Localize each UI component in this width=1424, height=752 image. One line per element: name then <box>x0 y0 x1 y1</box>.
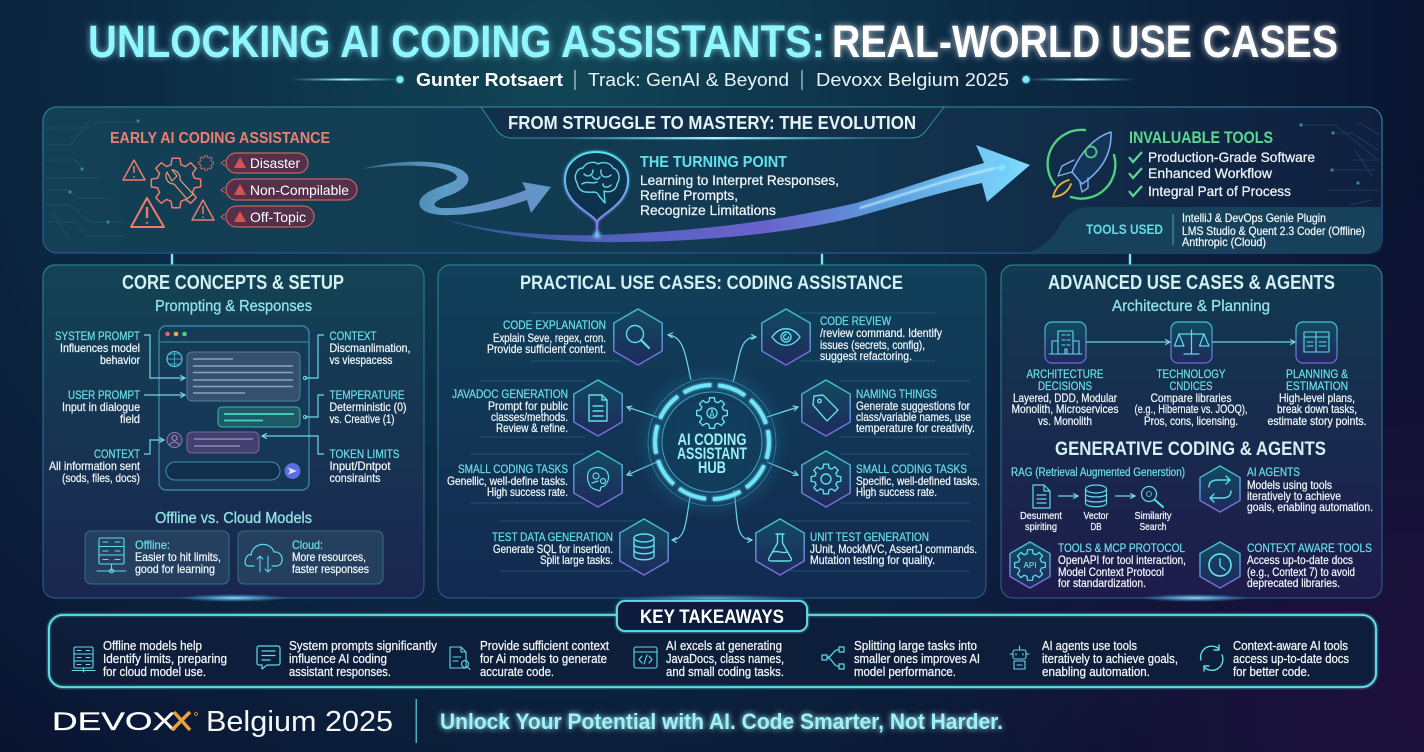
card: offline: Offline: <box>135 538 170 552</box>
card: cloud <box>238 531 383 584</box>
rag pipeline: Desument <box>1020 510 1062 522</box>
heading tab: key takeaways <box>617 601 807 631</box>
use case: code explanation: Provide sufficient content. <box>487 342 606 356</box>
icon: planning board <box>1296 322 1337 363</box>
takeaway 3: accurate code. <box>480 665 554 679</box>
tools used panel: Anthropic (Cloud) <box>1182 235 1266 249</box>
technology choices text <box>1134 367 1248 428</box>
takeaway 3: Provide sufficient context <box>480 639 609 653</box>
panel: key takeaways <box>49 601 1376 687</box>
left labels: SYSTEM PROMPT <box>55 329 141 343</box>
takeaway 7: access up-to-date docs <box>1233 652 1349 666</box>
rag pipeline: spiriting <box>1025 521 1057 533</box>
invaluable tools list: INVALUABLE TOOLS <box>1129 129 1273 147</box>
left labels: behavior <box>100 353 140 367</box>
left labels: All information sent <box>49 459 141 473</box>
left labels: USER PROMPT <box>68 388 141 402</box>
icon: broken gear and warnings <box>123 156 214 227</box>
technology choices text: TECHNOLOGY <box>1156 367 1226 381</box>
right labels: vs viespacess <box>330 353 392 367</box>
use case: code review <box>762 309 942 365</box>
context aware tools: CONTEXT AWARE TOOLS <box>1247 541 1372 555</box>
header tab: FROM STRUGGLE TO MASTERY: THE EVOLUTION <box>508 113 916 133</box>
use case: test data generation: Generate SQL for insertion. <box>493 542 613 556</box>
takeaway 1 <box>72 639 227 679</box>
architecture decisions text: DECISIONS <box>1038 379 1092 393</box>
takeaway 2: System prompts significantly <box>289 639 438 653</box>
right labels: Discmanlimation, <box>330 341 410 355</box>
footer logo: devoxx belgium 2025: DEVOX <box>52 708 176 736</box>
subtitle: Devoxx Belgium 2025 <box>816 70 1009 90</box>
context aware tools: (e.g., Context 7) to avoid <box>1247 565 1355 579</box>
takeaway 5: Splitting large tasks into <box>854 639 977 653</box>
architecture decisions text: Monolith, Microservices <box>1012 402 1118 416</box>
tools used panel: TOOLS USED <box>1086 221 1163 237</box>
takeaway 4: and small coding tasks. <box>666 665 784 679</box>
takeaway 1: for cloud model use. <box>103 665 206 679</box>
planning and estimation text: PLANNING & <box>1286 367 1348 381</box>
use case: code review: /review command. Identify <box>820 326 942 340</box>
icon: rocket <box>1048 130 1115 199</box>
use case: unit test generation: UNIT TEST GENERATION <box>810 530 929 544</box>
use case: small coding tasks right: Specific, well-defined tasks. <box>856 474 980 488</box>
early AI heading: EARLY AI CODING ASSISTANCE <box>110 130 330 147</box>
use case: naming things: class/variable names, use <box>856 410 971 424</box>
takeaway 2 <box>257 639 438 679</box>
left labels: CONTEXT <box>94 447 141 461</box>
icon: architecture <box>1045 322 1086 363</box>
takeaway 6 <box>1010 639 1178 679</box>
architecture decisions text <box>1012 367 1118 428</box>
panel: advanced use cases and agents <box>1001 265 1382 598</box>
takeaway 5 <box>822 639 980 679</box>
takeaway 2: assistant responses. <box>289 665 391 679</box>
use case: unit test generation <box>756 519 977 575</box>
use case: test data generation: Split large tasks. <box>540 553 613 567</box>
left labels <box>49 329 141 485</box>
title: REAL-WORLD USE CASES <box>832 16 1338 67</box>
connector ticks <box>171 254 1131 265</box>
AI agents <box>1200 465 1373 514</box>
takeaway 2: influence AI coding <box>289 652 387 666</box>
use case: javadoc generation: Prompt for public <box>488 399 568 413</box>
circuit decoration left <box>46 118 140 240</box>
use case: small coding tasks right: High success rate. <box>856 485 937 499</box>
tools and MCP protocol: for standardization. <box>1058 576 1146 590</box>
tools used panel <box>1025 207 1382 253</box>
card: offline: good for learning <box>135 562 215 576</box>
right labels: Deterministic (0) <box>330 400 406 414</box>
heading: core concepts: CORE CONCEPTS & SETUP <box>122 272 344 294</box>
subtitle <box>291 70 1136 90</box>
icon: scales <box>1171 322 1212 363</box>
use case: naming things <box>802 380 975 436</box>
tools and MCP protocol: OpenAPI for tool interaction, <box>1058 553 1186 567</box>
invaluable tools list: Production-Grade Software <box>1148 149 1315 165</box>
icon: brain balloon <box>565 152 628 241</box>
panel: practical use cases <box>438 265 986 598</box>
card: offline <box>85 531 229 584</box>
card: cloud: Cloud: <box>292 538 323 552</box>
use case: small coding tasks left: Genellic, well-define tasks. <box>447 474 568 488</box>
callout: non-compilable: Non-Compilable <box>250 182 349 198</box>
tools and MCP protocol: Model Context Protocol <box>1058 565 1164 579</box>
architecture decisions text: Layered, DDD, Modular <box>1013 391 1117 405</box>
context aware tools: deprecated libraries. <box>1247 576 1340 590</box>
technology choices text: (e.g., Hibernate vs. JOOQ), <box>1134 402 1248 416</box>
takeaway 1: Identify limits, preparing <box>103 652 227 666</box>
architecture decisions text: ARCHITECTURE <box>1026 367 1104 381</box>
AI agents: AI AGENTS <box>1247 465 1300 479</box>
use case: javadoc generation: JAVADOC GENERATION <box>452 387 568 401</box>
right labels: TEMPERATURE <box>330 388 404 402</box>
rag pipeline: DB <box>1090 521 1102 533</box>
circuit decoration right <box>1299 122 1380 205</box>
AI agents: goals, enabling automation. <box>1247 500 1373 514</box>
use case: code explanation: CODE EXPLANATION <box>503 318 606 332</box>
takeaway 5: model performance. <box>854 665 956 679</box>
takeaway 7: Context-aware AI tools <box>1233 639 1348 653</box>
footer tagline: Unlock Your Potential with AI. Code Smarter, Not Harder. <box>440 709 1003 734</box>
use case: code explanation: Explain Seve, regex, cron. <box>493 331 606 345</box>
turning point text: Refine Prompts, <box>640 187 738 203</box>
planning and estimation text: estimate story points. <box>1268 414 1366 428</box>
card: offline: Easier to hit limits, <box>135 550 221 564</box>
turning point text: Recognize Limitations <box>640 202 776 218</box>
tools and MCP protocol: API <box>1024 561 1036 570</box>
heading: practical use cases: PRACTICAL USE CASES: CODING ASSISTANCE <box>520 273 903 294</box>
header tab <box>481 107 944 139</box>
use case: test data generation <box>492 519 668 575</box>
takeaway 6: iteratively to achieve goals, <box>1042 652 1178 666</box>
tools used panel: IntelliJ & DevOps Genie Plugin <box>1182 211 1326 225</box>
footer logo: devoxx belgium 2025 <box>52 706 393 738</box>
context aware tools <box>1200 541 1372 590</box>
right labels: vs. Creative (1) <box>330 412 394 426</box>
tools and MCP protocol <box>1010 541 1186 590</box>
title <box>88 16 1338 67</box>
use case: small coding tasks right <box>802 451 980 507</box>
title: UNLOCKING AI CODING ASSISTANTS: <box>88 16 825 67</box>
subtitle: Gunter Rotsaert <box>416 70 563 90</box>
panel: core concepts and setup <box>43 265 424 598</box>
context aware tools: Access up-to-date docs <box>1247 553 1353 567</box>
use case: javadoc generation: Review & refine. <box>496 421 568 435</box>
callout: off-topic: Off-Topic <box>250 209 306 225</box>
use case: javadoc generation: classes/methods. <box>491 410 568 424</box>
heading: advanced: ADVANCED USE CASES & AGENTS <box>1048 272 1335 294</box>
rag pipeline: RAG (Retrieval Augmented Generstion) <box>1011 467 1185 479</box>
turning point text: THE TURNING POINT <box>640 154 787 171</box>
use case: code review: suggest refactoring. <box>820 349 912 363</box>
chat window mockup <box>159 326 309 490</box>
card: cloud: faster responses <box>292 562 369 576</box>
subheading: architecture and planning: Architecture & Planning <box>1112 298 1270 315</box>
takeaway 6: enabling automation. <box>1042 665 1150 679</box>
rag pipeline <box>1011 467 1185 533</box>
card: cloud: More resources, <box>292 550 366 564</box>
callout: disaster <box>221 153 308 173</box>
use case: code explanation <box>487 309 662 365</box>
footer logo: devoxx belgium 2025: Belgium 2025 <box>206 706 393 738</box>
use case: small coding tasks left: SMALL CODING TASKS <box>458 462 568 476</box>
turning point text <box>640 154 839 218</box>
tools used panel: LMS Studio & Quent 2.3 Coder (Offline) <box>1182 224 1365 238</box>
connector lines <box>144 335 324 454</box>
use case: small coding tasks left: High success rate. <box>487 485 568 499</box>
use case: code review: issues (secrets, config), <box>820 338 925 352</box>
planning and estimation text: High-level plans, <box>1279 391 1355 405</box>
technology choices text: CNDICES <box>1170 379 1212 393</box>
rag pipeline: Similarity <box>1134 510 1172 522</box>
hub: HUB <box>698 459 726 477</box>
takeaway 7: for better code. <box>1233 665 1310 679</box>
right labels: CONTEXT <box>330 329 377 343</box>
takeaway 4: JavaDocs, class names, <box>666 652 784 666</box>
left labels: Influences model <box>60 341 140 355</box>
turning point text: Learning to Interpret Responses, <box>640 172 839 188</box>
invaluable tools list <box>1129 129 1315 199</box>
subtitle: Track: GenAI & Beyond <box>588 70 789 90</box>
use case: unit test generation: JUnit, MockMVC, AssertJ commands. <box>810 542 977 556</box>
use case: javadoc generation <box>452 380 622 436</box>
use case: code review: CODE REVIEW <box>820 314 892 328</box>
planning and estimation text <box>1268 367 1366 428</box>
icon: hub gear <box>697 398 727 428</box>
use case: naming things: Generate suggestions for <box>856 399 970 413</box>
planning and estimation text: break down tasks, <box>1277 402 1357 416</box>
takeaway 5: smaller ones improves AI <box>854 652 980 666</box>
panel bottom glows <box>179 594 1250 602</box>
takeaway 4: AI excels at generating <box>666 639 782 653</box>
takeaway 3: for Ai models to generate <box>480 652 607 666</box>
arrow: big evolution arrow <box>444 145 1030 242</box>
rag pipeline: Vector <box>1084 510 1109 522</box>
use case: unit test generation: Mutation testing for quality. <box>810 553 935 567</box>
left labels: field <box>120 412 140 426</box>
heading: generative coding: GENERATIVE CODING & AGENTS <box>1055 438 1326 460</box>
takeaway 7 <box>1201 639 1349 679</box>
underlines <box>470 313 970 571</box>
hub arrows <box>627 335 798 540</box>
subheading: offline vs cloud: Offline vs. Cloud Models <box>155 510 312 527</box>
footer divider <box>416 699 417 743</box>
right labels: TOKEN LIMITS <box>330 447 400 461</box>
use case: test data generation: TEST DATA GENERATION <box>492 530 613 544</box>
flow arrows <box>1086 341 1295 343</box>
use case: small coding tasks left <box>447 451 622 507</box>
panel: from struggle to mastery <box>43 107 1382 253</box>
right labels <box>330 329 410 485</box>
AI agents: Models using tools <box>1247 478 1332 492</box>
architecture decisions text: vs. Monolith <box>1038 414 1092 428</box>
subheading: prompting: Prompting & Responses <box>155 298 312 315</box>
rag pipeline: Search <box>1140 521 1167 533</box>
hub <box>634 364 790 520</box>
arrow: swoosh to turning point <box>361 162 551 215</box>
heading tab: key takeaways: KEY TAKEAWAYS <box>640 607 784 628</box>
AI agents: iteratively to achieve <box>1247 489 1341 503</box>
right labels: Input/Dntpot <box>330 459 391 473</box>
hub: AI CODING <box>678 431 746 449</box>
use case: small coding tasks right: SMALL CODING TASKS <box>856 462 967 476</box>
planning and estimation text: ESTIMATION <box>1286 379 1348 393</box>
hub: ASSISTANT <box>677 445 747 463</box>
use case: naming things: temperature for creativity. <box>856 421 975 435</box>
callout: disaster: Disaster <box>250 155 300 171</box>
right labels: consiraints <box>330 471 380 485</box>
invaluable tools list: Enhanced Workflow <box>1148 165 1273 181</box>
takeaway 1: Offline models help <box>103 639 202 653</box>
takeaway 4 <box>634 639 784 679</box>
invaluable tools list: Integral Part of Process <box>1148 183 1291 199</box>
use case: naming things: NAMING THINGS <box>856 387 937 401</box>
takeaway 3 <box>450 639 609 679</box>
left labels: (sods, files, docs) <box>62 471 140 485</box>
takeaway 6: AI agents use tools <box>1042 639 1137 653</box>
callout: off-topic <box>221 206 314 227</box>
technology choices text: Compare libraries <box>1150 391 1232 405</box>
tools and MCP protocol: TOOLS & MCP PROTOCOL <box>1058 541 1185 555</box>
left labels: Input in dialogue <box>62 400 140 414</box>
callout: non-compilable <box>221 179 357 200</box>
technology choices text: Pros, cons, licensing. <box>1144 414 1238 428</box>
